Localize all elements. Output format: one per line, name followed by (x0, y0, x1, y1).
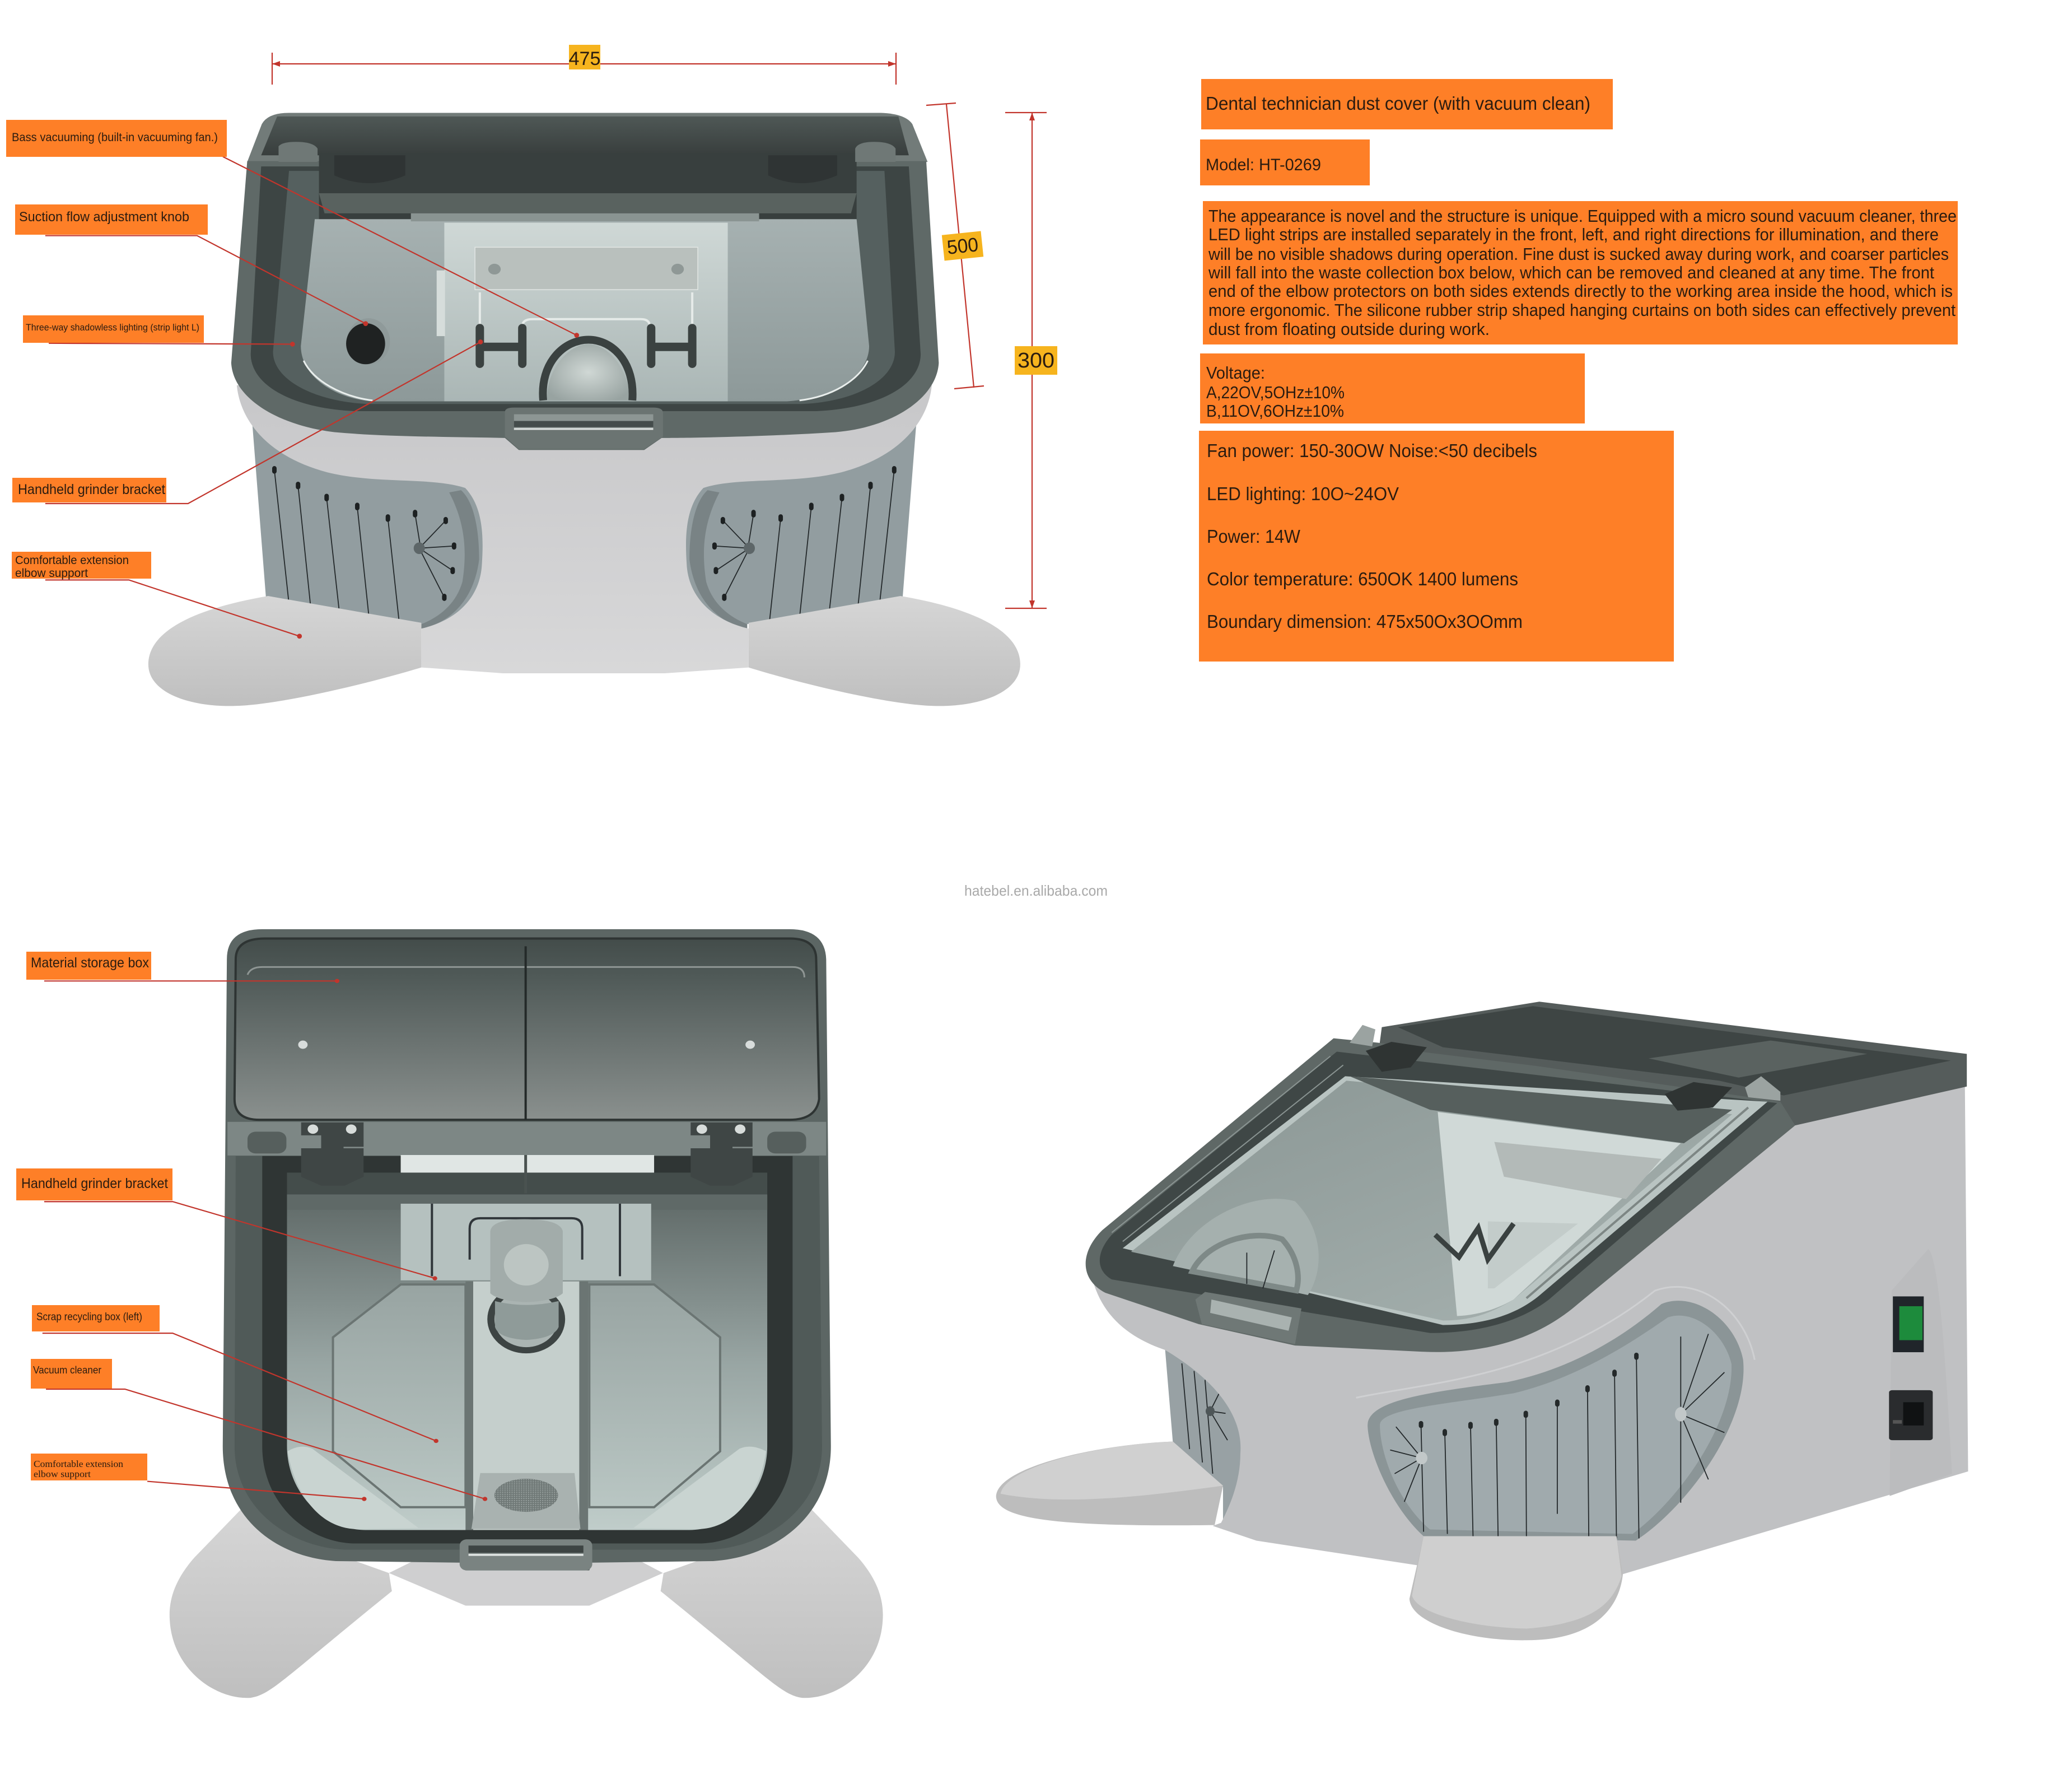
specifications (1199, 431, 1674, 662)
pegs (248, 1131, 806, 1153)
description: The appearance is novel and the structure is unique. Equipped with a micro sound vacuum cleaner, three (1208, 206, 1957, 226)
watermark: hatebel.en.alibaba.com (964, 882, 1108, 899)
label: grinder bracket (12, 478, 166, 502)
center panel (444, 223, 728, 401)
right elbow support (749, 596, 1020, 706)
interior floor (301, 219, 869, 401)
dimension: width 475 (272, 45, 896, 85)
tray divider (525, 946, 527, 1120)
big louver panel (1368, 1301, 1743, 1540)
specifications: Fan power: 150-30OW Noise:<50 decibels (1207, 440, 1537, 461)
label: scrap box (32, 1305, 160, 1331)
hinge left (334, 155, 405, 183)
dimension: height 300 (1005, 113, 1057, 608)
label: elbow support: elbow support (34, 1469, 91, 1479)
handheld grinder bracket left (480, 328, 522, 364)
right glass strip shade (1527, 1107, 1748, 1298)
voltage (1200, 353, 1585, 423)
left louver (1165, 1350, 1276, 1530)
hinge rod (1398, 1047, 1706, 1085)
vacuum pipe (487, 1219, 565, 1353)
light strip (411, 213, 759, 221)
description (1203, 201, 1958, 344)
callout lines (45, 157, 579, 639)
specifications: Boundary dimension: 475x50Ox3OOmm (1207, 611, 1523, 632)
side recess (1889, 1249, 1952, 1496)
label: vacuum cleaner (31, 1359, 112, 1389)
hinge screws (307, 1124, 745, 1134)
voltage: A,22OV,5OHz±10% (1206, 383, 1345, 402)
frame inner band (1100, 1052, 1777, 1333)
left foot (996, 1442, 1223, 1525)
specifications: LED lighting: 10O~24OV (1207, 483, 1399, 504)
back storage tray (247, 113, 927, 162)
vacuum ring (543, 339, 633, 400)
specifications: Color temperature: 650OK 1400 lumens (1207, 569, 1518, 589)
corner elbow supports (288, 1447, 766, 1529)
screws (488, 264, 684, 274)
center channel (465, 1282, 588, 1530)
window frame (235, 1156, 822, 1550)
title (1201, 79, 1613, 129)
lid frame (231, 161, 939, 450)
label: grinder bracket: Handheld grinder bracket (18, 482, 165, 497)
pegs (278, 142, 895, 162)
device: perspective view (996, 1002, 1968, 1640)
dimension: depth 500: 500 (946, 234, 979, 259)
model (1200, 139, 1370, 185)
description: more ergonomic. The silicone rubber strip shaped hanging curtains on both sides can effectively prevent (1208, 300, 1956, 320)
tray screws (298, 1041, 755, 1049)
glass highlights (304, 361, 868, 400)
back wall band (319, 153, 857, 220)
left louver panel (252, 421, 529, 635)
label: bass vacuuming: Bass vacuuming (built-in vacuuming fan.) (12, 131, 218, 144)
tray inner edge (248, 967, 804, 977)
description: dust from floating outside during work. (1208, 319, 1490, 339)
label: elbow support: Comfortable extension (34, 1459, 124, 1469)
description: will be no visible shadows during operation. Fine dust is sucked away during work, and coarser particles (1208, 244, 1949, 264)
left scrap box (333, 1284, 465, 1507)
title: Dental technician dust cover (with vacuum clean) (1206, 93, 1590, 114)
back tray (1379, 1002, 1967, 1125)
side dome (1173, 1199, 1319, 1295)
bracket wires (432, 1204, 620, 1276)
lid frame (1086, 1038, 1795, 1352)
label: grinder bracket (16, 1168, 172, 1200)
front handle (460, 1539, 592, 1571)
power inlet (1889, 1390, 1933, 1440)
suction knob (346, 318, 390, 365)
label: bass vacuuming (6, 120, 227, 157)
handheld grinder bracket right (651, 328, 692, 364)
front handle (1196, 1292, 1301, 1344)
vent (472, 1473, 581, 1529)
deck band (227, 1122, 826, 1156)
label: lighting: Three-way shadowless lighting (strip light L) (26, 322, 199, 333)
right scrap box (589, 1284, 720, 1507)
frame stripes (1112, 1056, 1343, 1241)
label: scrap box: Scrap recycling box (left) (36, 1311, 142, 1323)
voltage: Voltage: (1206, 363, 1265, 383)
vacuum ball (547, 344, 629, 400)
front body (389, 1550, 663, 1605)
voltage: B,11OV,6OHz±10% (1206, 401, 1344, 421)
label: elbow support (12, 552, 151, 580)
label: vacuum cleaner: Vacuum cleaner (33, 1364, 101, 1376)
device: front view (45, 113, 1020, 706)
back light strip (401, 1155, 654, 1176)
grinder bracket panel (401, 1204, 651, 1280)
center divider (524, 1155, 527, 1193)
storage tray (235, 938, 819, 1120)
label: elbow support: elbow support (15, 567, 88, 580)
right elbow support (661, 1506, 883, 1698)
dimension: width 475: 475 (569, 48, 600, 69)
label: suction knob (15, 204, 208, 235)
dimension: depth 500 (926, 103, 984, 389)
description: end of the elbow protectors on both sides extends directly to the working area inside the hood, which is (1208, 281, 1953, 301)
hinge left (1366, 1042, 1427, 1072)
rocker switch (1893, 1296, 1924, 1352)
front foot (1410, 1536, 1623, 1640)
label: suction knob: Suction flow adjustment knob (19, 209, 189, 225)
description: will fall into the waste collection box below, which can be removed and cleaned at any time. The front (1208, 263, 1934, 282)
label: grinder bracket: Handheld grinder bracket (21, 1176, 168, 1191)
hinge right (1665, 1082, 1732, 1111)
label: elbow support (31, 1454, 147, 1480)
bracket (1435, 1223, 1514, 1259)
glass rim (1123, 1076, 1767, 1325)
pegs (1350, 1025, 1780, 1101)
mounting plate (475, 247, 698, 290)
main body (237, 385, 932, 673)
panel surround (1356, 1287, 1754, 1398)
label: material storage (26, 952, 151, 980)
back wall and plates (1350, 1076, 1732, 1316)
right louver panel (640, 421, 917, 635)
device: top view (43, 929, 883, 1698)
hinge right (768, 155, 837, 183)
dimension: height 300: 300 (1018, 349, 1054, 372)
label: material storage: Material storage box (31, 955, 149, 971)
interior floor (287, 1195, 767, 1530)
interior (1131, 1081, 1732, 1320)
left elbow support (148, 596, 421, 706)
specifications: Power: 14W (1207, 526, 1301, 547)
model: Model: HT-0269 (1206, 156, 1321, 174)
description: LED light strips are installed separately in the front, left, and right directions for illumination, and there (1208, 225, 1939, 244)
label: lighting (23, 315, 204, 343)
left elbow support (170, 1506, 392, 1698)
label: elbow support: Comfortable extension (15, 554, 129, 567)
front handle (505, 408, 663, 449)
wire brackets (480, 292, 692, 327)
main body (1093, 1087, 1968, 1574)
hinges (301, 1123, 753, 1186)
callout lines (43, 979, 487, 1501)
outer frame (223, 929, 831, 1571)
